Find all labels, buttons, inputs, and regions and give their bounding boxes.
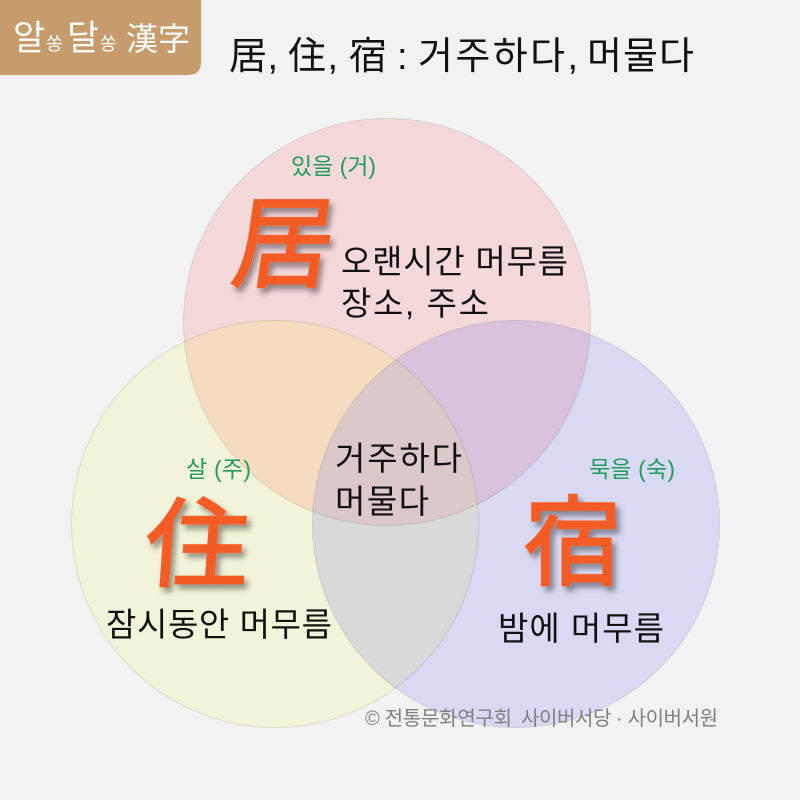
badge: series logo: 알 xyxy=(13,19,45,58)
text: 居 meaning: 오랜시간 머무름 xyxy=(341,243,568,280)
circle: 住 xyxy=(72,320,478,728)
badge: series logo: 漢字 xyxy=(126,21,190,57)
text: 居 meaning: 장소, 주소 xyxy=(341,285,489,322)
text: 居 meaning xyxy=(341,243,568,322)
badge: series logo xyxy=(0,0,201,75)
title xyxy=(229,36,694,78)
label: 묵을 (숙): 묵을 (숙) xyxy=(589,456,675,482)
overlap: 住 and 宿 xyxy=(312,504,478,688)
text: centre meaning: 거주하다 xyxy=(335,440,462,477)
text: centre meaning xyxy=(335,440,462,520)
title: 居, xyxy=(229,36,278,78)
hanja: 居: 居 xyxy=(225,163,345,308)
overlap: centre xyxy=(313,360,478,526)
circle: 居 xyxy=(184,118,590,526)
hanja: 宿: 宿 xyxy=(524,464,622,606)
title: : xyxy=(397,36,408,78)
badge: series logo: 쏭 xyxy=(100,34,117,54)
label: 있을 (거): 있을 (거) xyxy=(291,153,376,179)
title: 住, xyxy=(288,36,338,78)
title: 거주하다, xyxy=(418,36,578,78)
title: 머물다 xyxy=(587,36,694,78)
badge: series logo: 달 xyxy=(67,19,99,58)
copyright: 사이버서당 · 사이버서원 xyxy=(521,707,718,730)
venn diagram xyxy=(72,118,720,728)
copyright xyxy=(365,707,718,730)
text: 宿 meaning: 밤에 머무름 xyxy=(498,610,664,647)
overlap: 居 and 宿 xyxy=(396,320,590,504)
overlap: 居 and 住 xyxy=(184,320,395,512)
copyright: © 전통문화연구회 xyxy=(365,707,512,730)
text: centre meaning: 머물다 xyxy=(335,483,429,520)
badge: series logo: 쏭 xyxy=(46,34,63,54)
text: 住 meaning: 잠시동안 머무름 xyxy=(106,606,332,643)
circle: 宿 xyxy=(312,320,720,728)
circle outlines xyxy=(72,118,720,728)
hanja: 住: 住 xyxy=(141,466,255,607)
label: 살 (주): 살 (주) xyxy=(186,456,251,482)
title: 宿 xyxy=(349,36,387,78)
